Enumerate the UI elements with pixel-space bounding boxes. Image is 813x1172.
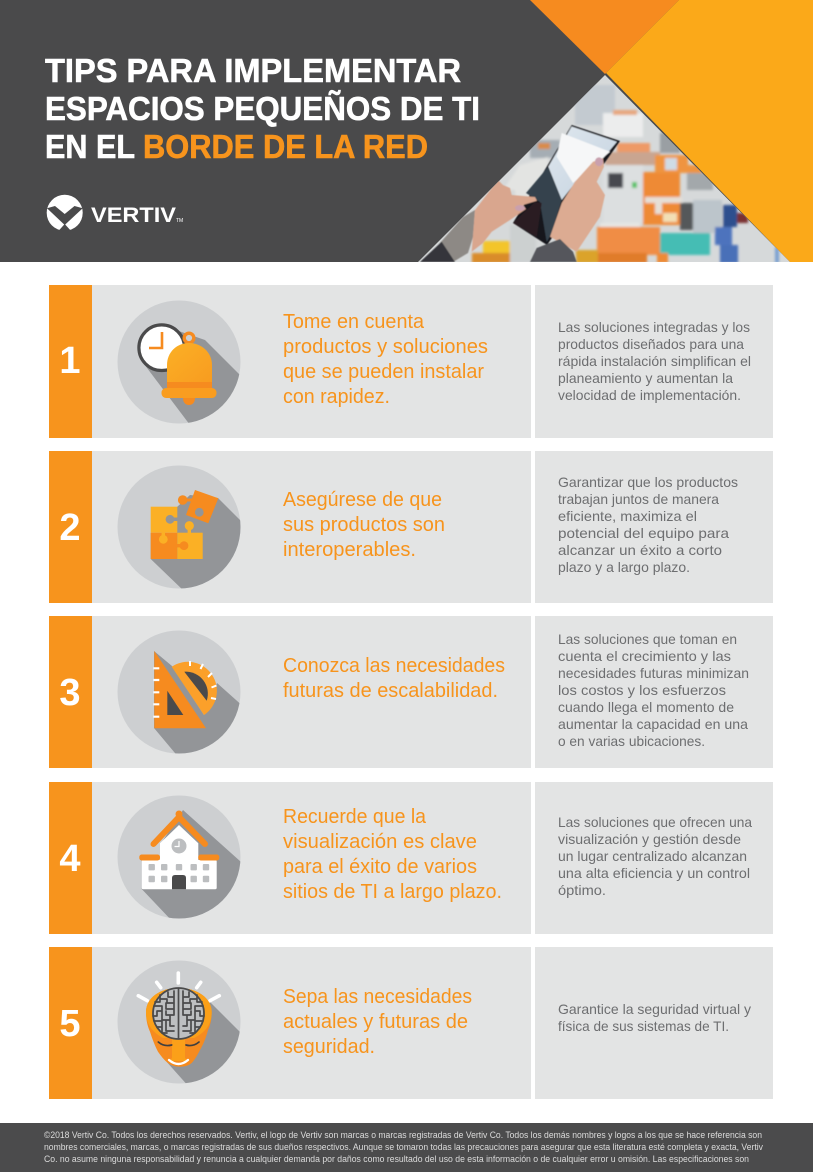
- description 3: cuenta el crecimiento y las: [558, 648, 731, 664]
- description 1: velocidad de implementación.: [558, 387, 741, 403]
- right sleeve: [530, 239, 577, 262]
- description 3: Las soluciones que toman en: [558, 631, 737, 647]
- number tab 1: 1: [59, 340, 81, 382]
- heading 3: [283, 655, 505, 702]
- description 1: planeamiento y aumentan la: [558, 370, 733, 386]
- number tab 3: 3: [59, 672, 81, 714]
- Vertiv logo: [47, 195, 183, 232]
- heading 5: Sepa las necesidades: [283, 986, 472, 1008]
- icon: clock and bell: [118, 300, 250, 425]
- description 5: física de sus sistemas de TI.: [558, 1018, 729, 1034]
- heading 4: para el éxito de varios: [283, 856, 477, 878]
- description 4: Las soluciones que ofrecen una: [558, 814, 752, 830]
- yellow corner shape: [606, 0, 813, 262]
- description 2: eficiente, maximiza el: [558, 508, 697, 524]
- icon: set square and protractor: [118, 630, 240, 754]
- description 2: potencial del equipo para: [558, 525, 729, 541]
- description 1: rápida instalación simplifican el: [558, 353, 751, 369]
- title: TIPS PARA IMPLEMENTAR: [45, 52, 461, 89]
- description 3: o en varias ubicaciones.: [558, 733, 705, 749]
- heading 2: sus productos son: [283, 514, 445, 536]
- heading 2: interoperables.: [283, 539, 416, 561]
- description 4: un lugar centralizado alcanzan: [558, 848, 747, 864]
- panel: tip 1: [49, 285, 773, 438]
- description 5: [558, 1001, 751, 1034]
- description 2: alcanzar un éxito a corto: [558, 542, 722, 558]
- panel: tip 2: [49, 451, 773, 603]
- icon: head with brain: [118, 960, 240, 1084]
- heading 5: seguridad.: [283, 1036, 375, 1058]
- number tab 5: 5: [59, 1003, 81, 1045]
- title: [45, 52, 480, 165]
- description 3: [558, 631, 749, 749]
- heading 4: sitios de TI a largo plazo.: [283, 881, 502, 903]
- panel: tip 4: [49, 782, 773, 934]
- description 1: productos diseñados para una: [558, 336, 744, 352]
- heading 5: [283, 986, 472, 1058]
- left sleeve: [440, 210, 476, 262]
- number tab 3: [49, 616, 92, 768]
- number tab 4: 4: [59, 838, 81, 880]
- description 3: cuando llega el momento de: [558, 699, 734, 715]
- photo: hands holding tablet in factory: [415, 70, 795, 265]
- description 2: Garantizar que los productos: [558, 474, 738, 490]
- title: ESPACIOS PEQUEÑOS DE TI: [45, 90, 480, 127]
- heading 3: Conozca las necesidades: [283, 655, 505, 677]
- heading 1: con rapidez.: [283, 386, 390, 408]
- footer legal text: Co. no asume ninguna responsabilidad y renuncia a cualquier demanda por daños como resultado del uso de esta información o de cualquier error u omisión. Las especificaciones son: [44, 1154, 749, 1164]
- number tab 1: [49, 285, 92, 438]
- heading 4: [283, 806, 502, 903]
- panel: tip 3: [49, 616, 773, 768]
- footer legal text: ©2018 Vertiv Co. Todos los derechos reservados. Vertiv, el logo de Vertiv son marcas o marcas registradas de Vertiv Co. Todos los demás nombres y logos a los que se hace referencia son: [44, 1130, 762, 1140]
- description 2: plazo y a largo plazo.: [558, 559, 690, 575]
- icon: puzzle pieces: [118, 466, 250, 592]
- heading 5: actuales y futuras de: [283, 1011, 468, 1033]
- title: EN EL: [45, 128, 135, 165]
- description 4: una alta eficiencia y un control: [558, 865, 750, 881]
- left hand: [472, 180, 537, 252]
- right hand: [550, 158, 605, 252]
- footer legal text: nombres comerciales, marcas, o marcas registradas de sus dueños respectivos. Aunque se tomaron todas las precauciones para asegurar que esta literatura esté completa y exacta, Vertiv: [44, 1142, 764, 1152]
- heading 1: [283, 311, 488, 408]
- heading 1: que se pueden instalar: [283, 361, 484, 383]
- description 4: visualización y gestión desde: [558, 831, 741, 847]
- heading 1: productos y soluciones: [283, 336, 488, 358]
- Vertiv logo: VERTIV: [91, 204, 176, 227]
- description 3: aumentar la capacidad en una: [558, 716, 748, 732]
- title: BORDE DE LA RED: [143, 128, 428, 165]
- description 3: los costos y los esfuerzos: [558, 682, 726, 698]
- description 5: Garantice la seguridad virtual y: [558, 1001, 751, 1017]
- number tab 2: [49, 451, 92, 603]
- footer legal text: [0, 1123, 813, 1172]
- heading 2: Asegúrese de que: [283, 489, 442, 511]
- heading 4: Recuerde que la: [283, 806, 427, 828]
- heading 3: futuras de escalabilidad.: [283, 680, 498, 702]
- icon: building: [118, 796, 250, 922]
- description 2: trabajan juntos de manera: [558, 491, 719, 507]
- description 1: Las soluciones integradas y los: [558, 319, 750, 335]
- description 4: [558, 814, 752, 898]
- number tab 4: [49, 782, 92, 934]
- description 4: óptimo.: [558, 882, 606, 898]
- tablet: [513, 125, 620, 245]
- description 1: [558, 319, 751, 403]
- number tab 2: 2: [59, 507, 81, 549]
- heading 1: Tome en cuenta: [283, 311, 425, 333]
- number tab 5: [49, 947, 92, 1099]
- panel: tip 5: [49, 947, 773, 1099]
- heading 4: visualización es clave: [283, 831, 477, 853]
- heading 2: [283, 489, 445, 561]
- description 3: necesidades futuras minimizan: [558, 665, 749, 681]
- description 2: [558, 474, 738, 575]
- header banner: [0, 0, 813, 265]
- Vertiv logo: TM: [176, 218, 183, 224]
- orange corner triangle: [530, 0, 679, 74]
